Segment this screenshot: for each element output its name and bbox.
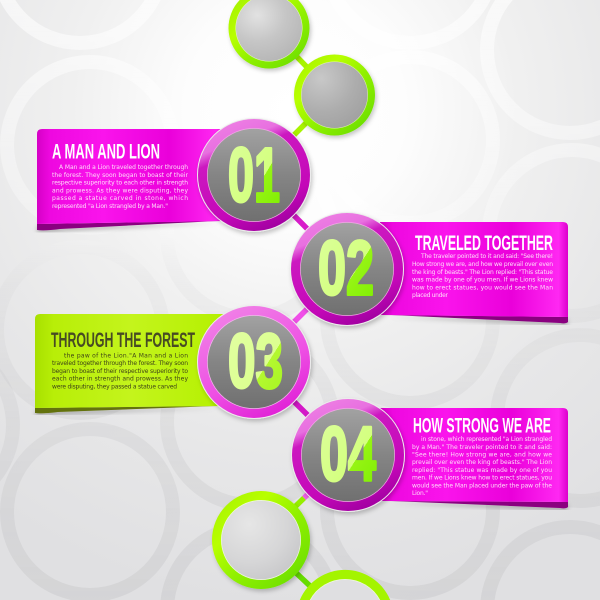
text block: panel 4 body — [412, 436, 552, 497]
text block: panel 4 body: would see the Man placed under the paw of the — [412, 482, 552, 489]
badge 02 — [290, 212, 404, 326]
heading: A Man and Lion: A MAN AND LION — [52, 140, 160, 164]
text block: panel 3 body: began to boast of their respective superiority to — [52, 368, 188, 375]
text block: panel 2 body — [412, 253, 553, 299]
text block: panel 4 body: Lion." — [412, 490, 428, 497]
text block: panel 2 body: how to erect statues, you would see the Man — [412, 284, 553, 291]
text block: panel 2 body: placed under — [412, 292, 449, 299]
text block: panel 1 body: and prowess. As they were disputing, they — [52, 187, 188, 194]
text block: panel 4 body: men. If we Lions knew how to erect statues, you — [412, 475, 552, 482]
text block: panel 4 body: replied: "This statue was made by one of you — [412, 467, 552, 474]
text block: panel 3 body: were disputing, they passed a statue carved — [52, 384, 177, 391]
text block: panel 4 body: by a Man." The traveler pointed to it and said: — [412, 444, 552, 451]
text block: panel 4 body: in stone, which represented "a Lion strangled — [421, 436, 552, 443]
text block: panel 1 body: passed a statue carved in stone, which — [52, 195, 188, 202]
text block: panel 1 body: the forest. They soon began to boast of their — [52, 172, 189, 179]
bottom green circle 1 — [212, 491, 310, 589]
number 01: 01 — [228, 132, 280, 218]
connector lines between circles — [254, 28, 348, 600]
text block: panel 1 body: respective superiority to each other in strength — [52, 180, 188, 187]
badge 04 — [291, 398, 405, 512]
text block: panel 3 body: each other in strength and prowess. As they — [52, 376, 188, 383]
text block: panel 1 body — [52, 164, 189, 210]
panel: Through the Forest — [35, 314, 226, 413]
text block: panel 3 body: the paw of the Lion."A Man and a Lion — [64, 352, 188, 359]
text block: panel 2 body: How strong we are, and how we prevail over even — [412, 261, 553, 268]
top green circle 1 — [228, 0, 310, 68]
number 02: 02 — [318, 226, 374, 312]
heading: Through the Forest: THROUGH THE FOREST — [51, 329, 195, 352]
text block: panel 2 body: was made by one of you men. If we Lions knew — [412, 277, 553, 284]
panel: How Strong We Are — [380, 408, 568, 508]
text block: panel 2 body: The traveler pointed to it and said: "See there! — [420, 253, 553, 260]
text block: panel 4 body: prevail over even the king of beasts." The Lion — [412, 459, 552, 466]
text block: panel 3 body: traveled together through the forest. They soon — [52, 360, 188, 367]
text block: panel 2 body: the king of beasts." The Lion replied: "This statue — [412, 269, 553, 276]
text block: panel 1 body: represented "a Lion strangled by a Man." — [52, 203, 168, 210]
badge 03 — [197, 305, 311, 419]
bottom green circle 2 — [300, 570, 390, 600]
text block: panel 1 body: A Man and a Lion traveled together through — [59, 164, 188, 171]
top green circle 2 — [294, 54, 375, 136]
text block: panel 3 body — [52, 352, 188, 391]
badge 01 — [197, 118, 311, 232]
number 03: 03 — [228, 318, 283, 404]
text block: panel 4 body: "See there! How strong we are, and how we — [412, 452, 552, 458]
panel: A Man and Lion — [37, 129, 226, 230]
number 04: 04 — [320, 412, 376, 498]
panel: Traveled Together — [380, 222, 568, 323]
